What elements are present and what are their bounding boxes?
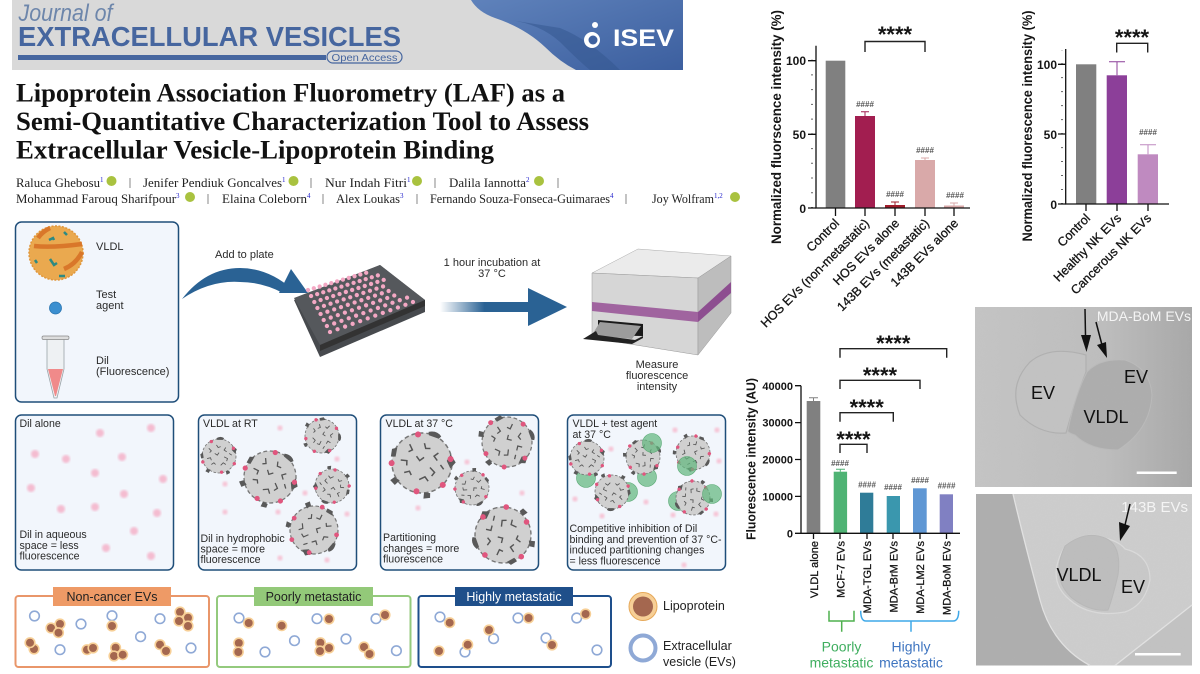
authors: 3 <box>176 192 180 200</box>
significance marks: #### <box>916 146 934 155</box>
label: poorly metastatic: Poorly metastatic <box>266 590 361 604</box>
arrows <box>1081 309 1107 358</box>
VLDL and EV outlines <box>1056 535 1150 614</box>
significance marks <box>1115 25 1157 137</box>
y ticks: 0 <box>1050 198 1057 212</box>
y axis title: Normalized fluorescence intensity (%) <box>1020 10 1035 242</box>
significance marks: **** <box>863 363 898 388</box>
label: VLDL: VLDL <box>1083 407 1129 427</box>
group bracket: highly metastatic: metastatic <box>879 655 943 671</box>
authors: 1 <box>100 176 104 184</box>
x labels: HOS EVs (non-metastatic) <box>758 216 872 330</box>
y ticks: 20000 <box>762 454 793 466</box>
x labels: MDA-BrM EVs <box>888 540 900 612</box>
authors: Elaina Coleborn <box>222 191 307 206</box>
icon: VLDL <box>29 226 83 280</box>
heading: VLDL + test agent: VLDL + test agent <box>572 418 657 430</box>
group bracket: highly metastatic: Highly <box>892 639 930 655</box>
x labels: Healthy NK EVs <box>1051 211 1124 284</box>
particles <box>433 608 602 657</box>
authors <box>16 175 740 206</box>
y ticks: 100 <box>786 54 806 68</box>
x labels: 143B EVs (metastatic) <box>834 216 932 314</box>
journal banner: ISEV <box>613 25 674 52</box>
heading: VLDL at RT: VLDL at RT <box>203 418 258 430</box>
y ticks: 0 <box>787 528 793 540</box>
micrograph: 143B EVs <box>976 494 1192 666</box>
label: VLDL: VLDL <box>96 241 124 253</box>
particles <box>24 606 196 662</box>
x labels <box>809 540 954 615</box>
arrow: incubation <box>440 288 567 326</box>
EV outline <box>1016 351 1086 433</box>
legend: extracellular vesicle <box>630 636 736 669</box>
authors: 1 <box>407 176 411 184</box>
legend: lipoprotein <box>629 592 725 620</box>
bars <box>807 398 953 533</box>
Dil dots <box>27 424 167 560</box>
Dil dots <box>222 425 350 563</box>
label: incubation: 37 °C <box>478 268 506 280</box>
legend: extracellular vesicle: Extracellular <box>663 639 732 653</box>
title <box>16 78 589 164</box>
chart: NK EV fluorescence <box>1020 10 1169 297</box>
significance marks: #### <box>856 100 874 109</box>
significance marks: #### <box>1139 128 1157 137</box>
label: measure fluorescence: Measure <box>636 359 678 371</box>
label: incubation: 1 hour incubation at <box>444 257 540 269</box>
x labels: Cancerous NK EVs <box>1068 211 1154 297</box>
panel: poorly metastatic <box>217 587 410 667</box>
journal banner <box>12 0 683 70</box>
axes <box>1058 49 1169 211</box>
significance marks: **** <box>878 22 913 47</box>
significance marks <box>856 22 964 200</box>
label: test agent: Test <box>96 289 116 301</box>
micrograph: MDA-BoM EVs <box>975 307 1192 487</box>
significance marks: #### <box>946 191 964 200</box>
x labels: VLDL alone <box>809 541 821 598</box>
y ticks <box>786 54 806 216</box>
authors: 4 <box>610 192 614 200</box>
authors: Nur Indah Fitri <box>325 175 407 190</box>
y axis title: Fluorescence intensity (AU) <box>744 378 758 540</box>
authors: Dalila Iannotta <box>449 175 526 190</box>
significance marks: **** <box>1115 25 1150 50</box>
VLDL particles with test agent <box>568 427 722 524</box>
significance marks: **** <box>836 427 871 452</box>
bars <box>826 61 964 208</box>
label: non-cancer EVs: Non-cancer EVs <box>66 590 158 604</box>
authors: 2 <box>526 176 530 184</box>
y ticks: 50 <box>1044 128 1057 142</box>
legend: extracellular vesicle: vesicle (EVs) <box>663 655 736 669</box>
journal banner: EXTRACELLULAR VESICLES <box>18 21 401 52</box>
significance marks: #### <box>886 190 904 199</box>
label: EV: EV <box>1031 383 1055 403</box>
authors: Jenifer Pendiuk Goncalves <box>143 175 282 190</box>
group bracket: poorly metastatic: metastatic <box>810 655 873 671</box>
title: Lipoprotein Association Fluorometry (LAF) as a <box>16 78 565 108</box>
legend: lipoprotein: Lipoprotein <box>663 599 725 613</box>
label: test agent: agent <box>96 300 124 312</box>
particles <box>233 609 401 660</box>
x labels: 143B EVs alone <box>888 216 961 290</box>
Dil dots <box>572 427 722 568</box>
x labels: MCF-7 EVs <box>836 541 848 598</box>
title: Extracellular Vesicle-Lipoprotein Binding <box>16 136 494 164</box>
significance marks: #### <box>884 483 902 492</box>
VLDL outline <box>1068 360 1152 450</box>
panel: highly metastatic <box>418 587 611 667</box>
label: highly metastatic: Highly metastatic <box>466 590 562 604</box>
panel: reagents legend <box>16 222 178 402</box>
authors: 1,2 <box>714 192 723 200</box>
caption: space = less <box>20 540 79 552</box>
axes <box>808 46 970 216</box>
label: VLDL: VLDL <box>1056 565 1102 585</box>
icon: well plate <box>294 265 425 357</box>
authors: Fernando Souza-Fonseca-Guimaraes <box>430 191 610 206</box>
label: EV: EV <box>1121 577 1145 597</box>
caption: binding and prevention of 37 °C- <box>570 534 722 546</box>
journal banner: Journal of <box>18 0 115 27</box>
group bracket: poorly metastatic: Poorly <box>822 639 861 655</box>
scale bar <box>1135 653 1181 656</box>
VLDL particles <box>200 417 356 567</box>
caption: fluorescence <box>20 550 80 562</box>
y ticks: 30000 <box>762 418 793 430</box>
significance marks: **** <box>876 331 911 356</box>
label: add to plate: Add to plate <box>215 249 274 261</box>
y ticks <box>762 381 793 540</box>
authors: Joy Wolfram <box>652 191 714 206</box>
authors: 3 <box>400 192 404 200</box>
Dil dots <box>415 459 525 511</box>
caption: Dil in aqueous <box>20 529 87 541</box>
panel: VLDL at RT <box>198 415 356 570</box>
panel: VLDL at 37 C <box>380 407 542 575</box>
significance marks: #### <box>938 482 956 490</box>
journal banner: Open Access <box>332 52 398 64</box>
icon: Dil tube <box>42 336 69 398</box>
authors: 4 <box>307 192 311 200</box>
x labels: HOS EVs alone <box>830 216 902 288</box>
axes <box>795 386 960 539</box>
chart: osteosarcoma EV fluorescence <box>758 10 970 330</box>
y ticks: 40000 <box>762 381 793 393</box>
y axis title: Normalized fluorscence intensity (%) <box>769 10 784 244</box>
label: 143B EVs: 143B EVs <box>1121 499 1188 516</box>
label: highly metastatic <box>455 587 573 606</box>
label: MDA-BoM EVs: MDA-BoM EVs <box>1097 308 1191 324</box>
authors: Raluca Ghebosu <box>16 175 100 190</box>
panel: Dil alone <box>16 415 174 570</box>
x labels <box>758 216 961 330</box>
arrow <box>1119 504 1130 541</box>
caption: space = more <box>200 544 265 556</box>
arrow: add to plate <box>182 268 308 299</box>
x labels: Control <box>1055 211 1093 250</box>
authors: Alex Loukas <box>336 191 400 206</box>
label: Dil: (Fluorescence) <box>96 366 169 378</box>
caption: Partitioning <box>383 532 436 544</box>
y ticks: 100 <box>1037 58 1057 72</box>
x labels: MDA-TGL EVs <box>862 541 874 613</box>
y ticks: 50 <box>793 128 806 142</box>
x labels: MDA-BoM EVs <box>942 541 954 615</box>
authors: 1 <box>282 176 286 184</box>
heading: VLDL at 37 C: VLDL at 37 °C <box>386 418 453 430</box>
caption: Competitive inhibition of Dil <box>570 523 697 535</box>
label: Dil: Dil <box>96 355 109 367</box>
caption: changes = more <box>383 543 459 555</box>
label: measure fluorescence: fluorescence <box>626 370 688 382</box>
label: poorly metastatic <box>254 587 373 606</box>
VLDL particles <box>380 407 542 575</box>
significance marks: #### <box>831 459 849 468</box>
authors: Mohammad Farouq Sharifpour <box>16 191 177 206</box>
panel: VLDL + test agent <box>568 415 726 570</box>
significance marks <box>831 331 956 492</box>
significance marks: #### <box>911 476 929 485</box>
y ticks: 10000 <box>762 492 793 504</box>
label: non-cancer EVs <box>53 587 171 606</box>
y ticks: 0 <box>799 202 806 216</box>
significance marks: #### <box>858 480 876 490</box>
caption: = less fluorescence <box>570 556 661 568</box>
caption: Dil in hydrophobic <box>200 533 285 545</box>
scale bar <box>1137 472 1177 474</box>
chart: breast cancer EV fluorescence <box>744 331 960 671</box>
significance marks: **** <box>850 395 884 420</box>
y ticks <box>1037 58 1057 212</box>
caption: fluorescence <box>383 554 443 566</box>
icon: plate reader <box>583 249 731 355</box>
title: Semi-Quantitative Characterization Tool to Assess <box>16 107 589 136</box>
heading: Dil alone: Dil alone <box>20 418 61 430</box>
x labels: Control <box>804 216 842 255</box>
x labels: MDA-LM2 EVs <box>915 541 927 614</box>
label: EV: EV <box>1124 367 1148 387</box>
caption: induced partitioning changes <box>570 544 704 556</box>
bars <box>1076 62 1158 204</box>
heading: VLDL + test agent: at 37 °C <box>572 429 611 441</box>
icon: test agent <box>50 302 62 314</box>
group bracket: poorly metastatic <box>810 611 873 671</box>
panel: non-cancer EVs <box>16 587 209 667</box>
group bracket: highly metastatic <box>861 611 959 671</box>
label: measure fluorescence: intensity <box>637 381 678 393</box>
caption: fluorescence <box>200 554 261 566</box>
